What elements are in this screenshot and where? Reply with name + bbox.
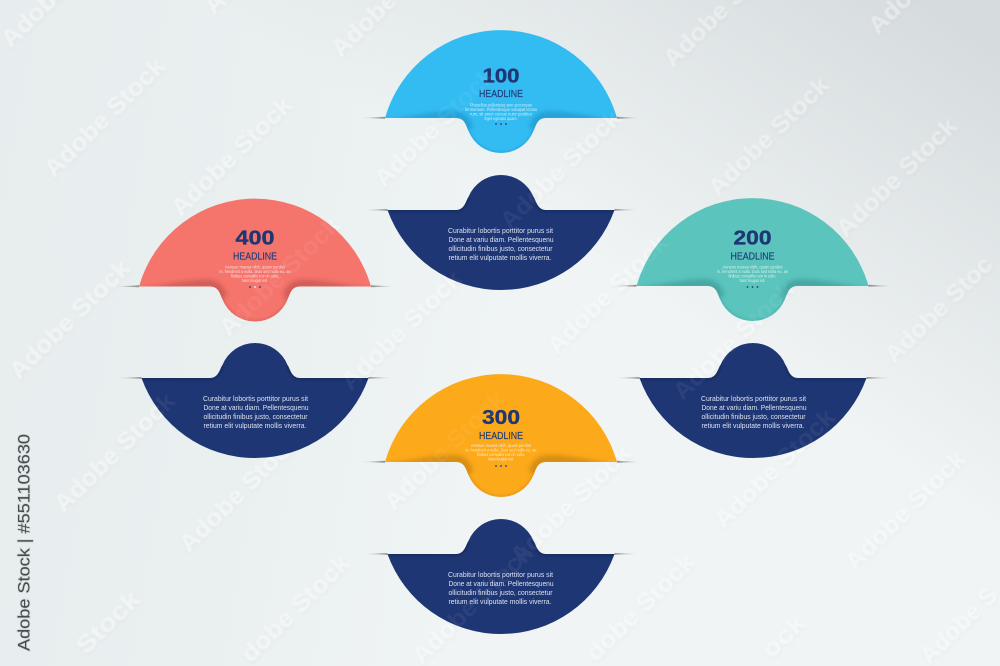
headline: HEADLINE [479, 431, 523, 442]
small body text: Nam feugiat est. [488, 456, 514, 462]
panel: 300 lower navy half circle [363, 519, 639, 634]
panel: 100 upper blue half circle [361, 30, 641, 153]
paragraph: retium elit vulputate mollis viverra. [448, 597, 552, 606]
watermark: Adobe Stock repeated background: Adobe Stock [49, 387, 181, 518]
small body text: Aenean massa nibh, quam perdiet [471, 443, 532, 448]
paragraph: Done at variu diam. Pellentesquenu [702, 403, 807, 412]
watermark: faint overlay across coloured shapes: Adobe Stock [336, 265, 468, 396]
watermark: Adobe Stock repeated background: Adobe Stock [840, 445, 972, 576]
three dots [249, 286, 261, 288]
paragraph: ollicitudin finibus justo, consectetur [448, 244, 553, 253]
paragraph: Done at variu diam. Pellentesquenu [448, 235, 554, 244]
panel: 400 lower navy half circle [117, 343, 393, 458]
small body text: in, hendrerit a nulla. Duis sed nulla eu, ae [466, 448, 537, 452]
small body text [220, 264, 291, 283]
watermark: faint overlay across coloured shapes: Adobe Stock [542, 229, 674, 360]
paragraph: ollicitudin finibus justo, consectetur [448, 588, 553, 597]
small body text: Aenean massa nibh, quam perdiet [225, 264, 286, 270]
panel: 400 upper coral half circle [115, 199, 395, 322]
watermark: Adobe Stock repeated background: Adobe Stock [505, 439, 637, 570]
watermark: Adobe Stock repeated background: Adobe Stock [336, 265, 468, 396]
number 100: 100 [482, 66, 520, 88]
number 300: 300 [482, 407, 520, 429]
watermark: faint overlay across coloured shapes: Adobe Stock [49, 387, 181, 518]
watermark: faint overlay across coloured shapes: Adobe Stock [369, 62, 501, 193]
watermark: Adobe Stock repeated background: Adobe Stock [166, 91, 298, 222]
number 400: 400 [236, 228, 274, 250]
small body text [465, 102, 537, 121]
watermark: faint overlay across coloured shapes: Adobe Stock [379, 385, 511, 516]
paragraph: retium elit vulputate mollis viverra. [702, 421, 805, 430]
watermark: faint overlay across coloured shapes: Adobe Stock [214, 211, 346, 342]
paragraph: Curabitur lobortis porttitor purus sit [448, 570, 553, 579]
watermark: Adobe Stock repeated background: Adobe Stock [369, 62, 501, 193]
paragraph [701, 394, 807, 430]
watermark: faint overlay across coloured shapes: Adobe Stock [505, 439, 637, 570]
watermark: Adobe Stock repeated background: Stock [71, 585, 146, 660]
small body text [466, 443, 537, 462]
watermark: faint overlay across coloured shapes [49, 62, 841, 666]
watermark: Adobe Stock repeated background: Adobe Stock [174, 427, 306, 558]
number 200: 200 [734, 228, 772, 250]
small body text: in, hendrerit a nulla. Duis sed nulla eu, ae [717, 269, 789, 274]
headline: HEADLINE [479, 89, 523, 100]
panel: 200 upper teal half circle [612, 198, 892, 321]
small body text: rum, sit amet cursus nunc porttitor [470, 112, 533, 116]
watermark: Adobe Stock repeated background: Adobe Stock [831, 112, 963, 243]
headline: HEADLINE [233, 252, 277, 262]
small body text: finibus convallis non in odio. [231, 274, 279, 278]
watermark: Adobe Stock repeated background: ock [756, 609, 812, 664]
paragraph: Done at variu diam. Pellentesquenu [204, 403, 309, 412]
watermark: Adobe Stock repeated background: Adobe Stock [4, 254, 136, 385]
watermark: Adobe Stock repeated background: Adobe Stock [379, 385, 511, 516]
small body text: finibus convallis non in odio. [728, 274, 776, 278]
paragraph: Curabitur lobortis porttitor purus sit [203, 394, 308, 403]
watermark: faint overlay across coloured shapes: Adobe Stock [668, 275, 800, 406]
headline: HEADLINE [730, 252, 775, 262]
paragraph: ollicitudin finibus justo, consectetur [702, 412, 806, 421]
small body text [717, 264, 789, 283]
watermark: faint overlay across coloured shapes: Adobe Stock [495, 104, 627, 235]
small body text: Nam feugiat est. [740, 278, 766, 283]
paragraph [448, 570, 554, 606]
small body text: Eget egestas quam. [484, 116, 518, 121]
watermark: Adobe Stock repeated background: Adobe Stock [495, 104, 627, 235]
watermark: Adobe Stock repeated background: Adobe Stoc [879, 251, 998, 368]
three dots [495, 465, 507, 467]
paragraph: ollicitudin finibus justo, consectetur [204, 412, 308, 421]
watermark: Adobe Stock repeated background: Adobe Stock [703, 71, 835, 202]
watermark: faint overlay across coloured shapes: Adobe Stock [407, 539, 539, 666]
panel: 300 upper orange half circle [361, 374, 641, 497]
paragraph: Curabitur lobortis porttitor purus sit [448, 226, 553, 235]
panel: 200 lower navy half circle [615, 343, 891, 458]
paragraph [448, 226, 554, 262]
small body text: Aenean massa nibh, quam perdiet [722, 264, 783, 270]
watermark: Adobe Stock repeated background: Adobe Stock [709, 403, 841, 534]
watermark: Adobe Stock repeated background: dobe Stock [581, 548, 701, 666]
paragraph: Curabitur lobortis porttitor purus sit [701, 394, 806, 403]
paragraph [203, 394, 309, 430]
watermark: Adobe Stock repeated background: Adobe Stock [407, 539, 539, 666]
watermark: faint overlay across coloured shapes: Adobe Stock [709, 403, 841, 534]
panel: 100 lower navy half circle [363, 175, 639, 290]
small body text: in, hendrerit a nulla. Duis sed nulla eu, ae [220, 269, 291, 274]
three dots [495, 123, 507, 125]
watermark: Adobe Stock repeated background: Adobe Stock [668, 275, 800, 406]
paragraph: retium elit vulputate mollis viverra. [448, 253, 552, 262]
paragraph: retium elit vulputate mollis viverra. [204, 421, 307, 430]
watermark: Adobe Stock repeated background: Adobe Stock [542, 229, 674, 360]
three dots [747, 286, 758, 288]
watermark: Adobe Stock repeated background: Adobe Stock [214, 211, 346, 342]
watermark: Adobe Stock repeated background: dobe Stock [236, 549, 356, 666]
watermark: Adobe Stock repeated background: Adobe Stock [39, 52, 171, 183]
stock id vertical caption: Adobe Stock | #551103630 [14, 434, 34, 651]
small body text: fermentum. Pellentesque volutpat lectus [465, 107, 537, 112]
small body text: Phasellus pellentesq sem accumsan [470, 102, 533, 108]
small body text: finibus convallis non in odio. [477, 452, 525, 457]
small body text: Nam feugiat est. [242, 278, 268, 283]
paragraph: Done at variu diam. Pellentesquenu [448, 579, 554, 588]
